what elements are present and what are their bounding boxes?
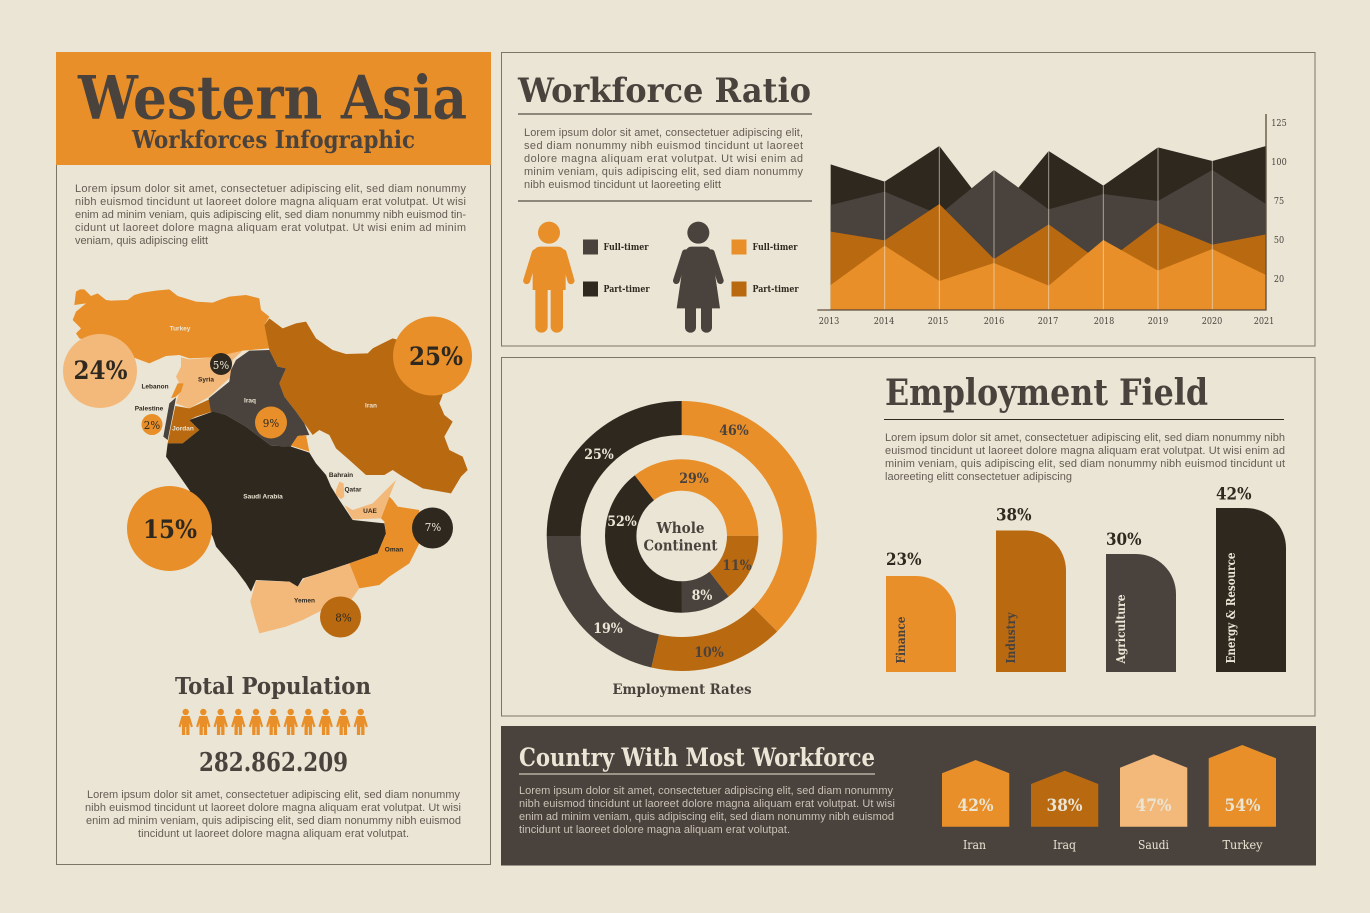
house bar: Saudi <box>1120 754 1187 852</box>
donut labels: 52% <box>607 514 637 530</box>
chart y axis labels: 125 <box>1271 119 1287 129</box>
workforce text block <box>524 127 804 191</box>
donut labels <box>584 423 752 661</box>
map region: Qatar <box>336 482 344 499</box>
map region: Syria <box>176 351 243 408</box>
legend: woman: Full-timer <box>752 242 798 253</box>
chart y axis labels: 100 <box>1271 158 1287 168</box>
donut labels: 29% <box>679 471 709 487</box>
country text block <box>519 785 895 836</box>
chart y axis labels: 20 <box>1274 275 1284 285</box>
legend: woman: Part-timer <box>752 284 799 295</box>
heading: total population: Total Population <box>175 673 371 700</box>
donut labels: 10% <box>694 645 724 661</box>
map bubble: Palestine 2% <box>142 414 162 435</box>
panel: workforce ratio <box>502 52 1315 346</box>
map labels: Saudi Arabia <box>243 494 283 500</box>
donut labels: 8% <box>692 588 712 604</box>
bar: industry: 38% <box>996 506 1032 526</box>
employment text block <box>885 432 1285 483</box>
map bubble: Syria 5% <box>210 353 232 375</box>
map labels: UAE <box>363 508 378 515</box>
map labels: Iran <box>365 402 377 410</box>
icon: man <box>527 222 571 333</box>
workforce text block: Lorem ipsum dolor sit amet, consectetuer adipiscing elit, <box>524 127 803 139</box>
intro text block: cidunt ut laoreet dolore magna aliquam erat volutpat. Ut wisi enim ad minim <box>75 222 466 234</box>
map bubble: Syria 5%: 5% <box>213 358 229 372</box>
intro text block <box>75 183 466 247</box>
house bar: Saudi: 47% <box>1136 796 1172 816</box>
bar: finance <box>886 550 956 672</box>
map: Western Asia <box>63 289 472 638</box>
map labels: Jordan <box>172 426 194 432</box>
chart y axis labels <box>1271 119 1287 285</box>
house bar: Turkey <box>1209 745 1276 852</box>
donut labels: 11% <box>722 558 752 574</box>
heading: employment field: Employment Field <box>885 372 1208 414</box>
map region: Yemen <box>250 563 359 633</box>
population text block <box>85 789 461 840</box>
donut labels: 25% <box>584 447 614 463</box>
house bar: Iraq <box>1031 771 1098 852</box>
area chart <box>817 114 1287 327</box>
house bar: Iran <box>942 760 1009 852</box>
legend: man <box>583 240 650 296</box>
heading: country with most workforce: Country With Most Workforce <box>519 743 875 772</box>
map bubble: Iran 25% <box>393 316 472 396</box>
workforce text block: sed diam nonummy nibh euismod tincidunt ut laoreet <box>524 140 803 152</box>
map bubble: Saudi Arabia 15% <box>127 486 212 571</box>
chart x axis labels <box>819 317 1274 327</box>
heading: workforce ratio: Workforce Ratio <box>517 71 811 111</box>
legend: man: Full-timer <box>604 242 649 253</box>
icon: woman <box>676 222 720 333</box>
bar: agriculture <box>1106 530 1176 672</box>
donut center label: Continent <box>644 536 718 554</box>
chart x axis labels: 2017 <box>1038 317 1058 327</box>
bar: finance: 23% <box>886 550 922 570</box>
map bubble: Oman 7%: 7% <box>425 520 441 534</box>
total population number: 282.862.209 <box>199 748 348 778</box>
map bubble: Oman 7% <box>412 508 453 548</box>
map region: Iran <box>264 318 468 493</box>
intro text block: nibh euismod tincidunt ut laoreet dolore magna aliquam erat volutpat. Ut wisi <box>75 196 466 208</box>
title: Western Asia <box>77 64 467 134</box>
map bubble: Yemen 8% <box>320 596 361 638</box>
map labels: Bahrain <box>329 472 353 479</box>
chart x axis labels: 2014 <box>874 317 894 327</box>
map bubble: Palestine 2%: 2% <box>144 418 160 432</box>
intro text block: enim ad minim veniam, quis adipiscing elit, sed diam nonummy nibh euismod tin- <box>75 209 466 221</box>
bar: industry <box>996 506 1066 672</box>
country text block: Lorem ipsum dolor sit amet, consectetuer adipiscing elit, sed diam nonummy <box>519 785 894 797</box>
employment text block: euismod tincidunt ut laoreet dolore magna aliquam erat volutpat. Ut wisi enim ad <box>885 445 1285 457</box>
workforce text block: nibh euismod tincidunt ut laoreeting elitt <box>524 179 721 191</box>
map labels: Lebanon <box>141 384 169 390</box>
title banner <box>56 52 491 165</box>
map labels: Turkey <box>170 326 191 332</box>
house bar: Iraq: Iraq <box>1053 838 1076 852</box>
map region: Jordan <box>168 399 212 443</box>
population text block: enim ad minim veniam, quis adipiscing elit, sed diam nonummy nibh euismod <box>86 815 461 827</box>
panel: employment <box>502 358 1315 716</box>
workforce text block: minim veniam, quis adipiscing elit, sed diam nonummy <box>524 166 804 178</box>
intro text block: Lorem ipsum dolor sit amet, consectetuer adipiscing elit, sed diam nonummy <box>75 183 466 195</box>
house bar: Iran: 42% <box>958 796 994 816</box>
chart x axis labels: 2020 <box>1202 317 1222 327</box>
map region: Lebanon <box>171 383 184 398</box>
house bar: Turkey: Turkey <box>1222 838 1263 852</box>
house bar: Iran: Iran <box>963 838 986 852</box>
chart x axis labels: 2013 <box>819 317 839 327</box>
map labels: Oman <box>385 546 403 554</box>
map labels: Qatar <box>345 486 362 494</box>
bar: industry: Industry <box>1004 612 1018 664</box>
population text block: Lorem ipsum dolor sit amet, consectetuer adipiscing elit, sed diam nonummy <box>87 789 460 801</box>
map region: Kuwait <box>291 435 309 452</box>
employment text block: laoreeting elitt consectetuer adipiscing <box>885 471 1072 483</box>
house bar: Iraq: 38% <box>1046 796 1083 816</box>
house bar: Saudi: Saudi <box>1138 838 1170 852</box>
bar: agriculture: 30% <box>1106 530 1142 550</box>
map region: UAE <box>344 480 396 519</box>
map region: Iraq <box>209 350 309 447</box>
donut chart <box>564 418 800 661</box>
chart x axis labels: 2018 <box>1094 317 1114 327</box>
intro text block: veniam, quis adipiscing elitt <box>75 235 208 247</box>
country text block: nibh euismod tincidunt ut laoreet dolore magna aliquam erat volutpat. Ut wisi <box>519 798 895 810</box>
bar: energy and resource: Energy & Resource <box>1224 552 1238 664</box>
map bubble: Yemen 8%: 8% <box>335 610 352 624</box>
donut labels: 19% <box>593 621 623 637</box>
map bubble: Turkey 24% <box>63 334 137 408</box>
donut center label: Whole <box>655 519 704 537</box>
chart caption: Employment Rates <box>612 682 752 698</box>
donut labels: 46% <box>719 423 749 439</box>
bar: energy and resource <box>1216 484 1286 672</box>
map labels: Syria <box>198 376 214 384</box>
employment text block: minim veniam, quis adipiscing elit, sed diam nonummy nibh euismod tincidunt ut <box>885 458 1285 470</box>
panel: country with most workforce <box>501 726 1316 866</box>
bar: finance: Finance <box>894 616 908 664</box>
population text block: nibh euismod tincidunt ut laoreet dolore magna aliquam erat volutpat. Ut wisi <box>85 802 461 814</box>
map labels: Palestine <box>135 406 164 412</box>
bar: agriculture: Agriculture <box>1114 594 1128 664</box>
map region: Oman <box>349 497 419 588</box>
chart y axis labels: 50 <box>1274 236 1284 246</box>
map bubble: Turkey 24%: 24% <box>74 356 128 385</box>
map bubble: Iraq 9% <box>255 406 287 438</box>
legend: man: Part-timer <box>604 284 650 295</box>
map bubble: Iraq 9%: 9% <box>263 416 279 430</box>
bar: energy and resource: 42% <box>1216 484 1252 504</box>
map region: Palestine <box>163 397 176 440</box>
employment text block: Lorem ipsum dolor sit amet, consectetuer adipiscing elit, sed diam nonummy nibh <box>885 432 1285 444</box>
population text block: tincidunt ut laoreet dolore magna aliquam erat volutpat. <box>138 828 409 840</box>
panel: left column <box>56 52 491 864</box>
chart x axis labels: 2021 <box>1254 317 1274 327</box>
legend: woman <box>732 240 799 296</box>
subtitle: Workforces Infographic <box>131 125 415 154</box>
chart x axis labels: 2015 <box>928 317 948 327</box>
map labels: Iraq <box>244 398 256 404</box>
chart x axis labels: 2016 <box>984 317 1004 327</box>
chart y axis labels: 75 <box>1274 197 1284 207</box>
country text block: enim ad minim veniam, quis adipiscing elit, sed diam nonummy nibh euismod <box>519 811 894 823</box>
map region: Turkey <box>73 289 269 363</box>
country text block: tincidunt ut laoreet dolore magna aliquam erat volutpat. <box>519 824 790 836</box>
donut center label <box>644 519 718 554</box>
map labels: Yemen <box>294 598 315 604</box>
icon row: population people <box>178 709 368 735</box>
map bubble: Iran 25%: 25% <box>409 342 463 371</box>
map labels <box>135 326 403 604</box>
chart x axis labels: 2019 <box>1148 317 1168 327</box>
map region: Saudi Arabia <box>166 412 386 592</box>
house bar: Turkey: 54% <box>1224 796 1261 816</box>
workforce text block: dolore magna aliquam erat volutpat. Ut wisi enim ad <box>524 153 803 165</box>
map bubble: Saudi Arabia 15%: 15% <box>143 515 197 544</box>
